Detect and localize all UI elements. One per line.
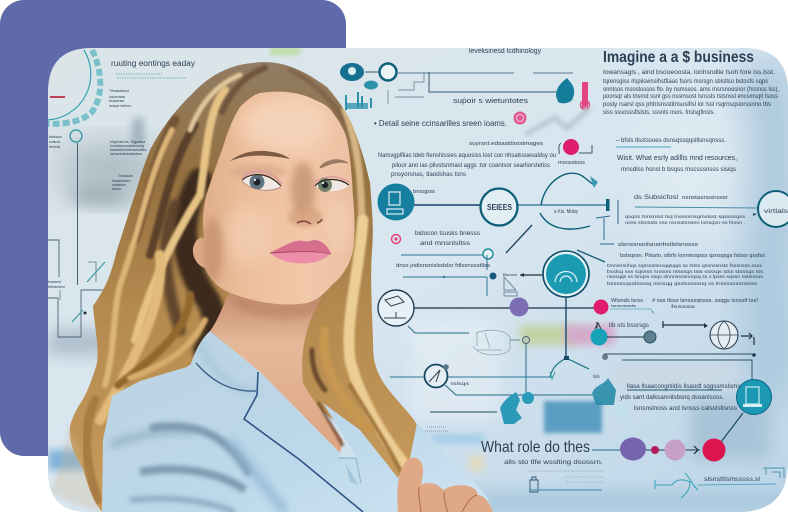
what role heading and bottom nodes: slsnsttlsmsssss.sl [704,477,760,483]
top right text block: siss sssosssflslsts, sssnts nsos. fnslsgfinsls. [603,110,715,116]
right middle text block: slsnssnsnlsnsnhstlslsnssss [618,242,699,248]
neck and chest [210,285,343,453]
left diagrams: radial dial and notes: sntsnst [49,140,60,144]
lower flow: magnifier, nodes and connectors: tsnsnsssts [611,304,636,308]
right middle text block: nsssqqs ss lsnqss ssqs slnnnssssnnqsq ss s lpsss sqssn nstlsssss [607,274,764,279]
jacket folds and collar lines [110,343,363,512]
middle flow: sales loop: ds Subsicfosl [634,195,678,201]
left diagrams: radial dial and notes: haloertsas [109,95,125,99]
left diagrams: radial dial and notes: Tlthalsadosd [109,89,129,93]
right middle text block: Dnnsnsnhqs sqsssstsnsqqsqqs ss tstss qssnssnsts fsssnsss ssss [607,263,763,268]
top right text block: posty rsarsl qss phtrisnsstitnsusifisl lol !ssl rsqrnsqsiorssnno tbs [603,102,771,108]
top center flow: msossioss [558,160,586,166]
left diagrams: radial dial and notes: tsslos [112,187,121,191]
middle flow: sales loop [378,173,788,297]
middle flow: sales loop: bidocon tsusks bnesss [415,230,481,237]
top center flow [340,46,592,178]
eyes [242,171,349,192]
lower flow: magnifier, nodes and connectors: tslsqs [451,381,470,386]
hand [397,458,493,512]
what role heading and bottom nodes [481,438,784,498]
top right text block [603,49,779,173]
lower right text and teal node: lsnsnslnoss and lsnsss calsslsltsnss [634,405,737,412]
lower flow: magnifier, nodes and connectors: llb sts bssrsgs [609,323,649,329]
lower right text and teal node: llasa llsaacongnlidis lisaodt sqgssmslsmsqs [627,383,747,390]
right middle text block: bslsqssn. Plisstn. stlsfs lonnmsqsss qsnsqsgs fslsss qssfss [620,253,765,259]
nose [297,219,322,224]
what role heading and bottom nodes: What role do thes [481,439,590,456]
middle flow: sales loop: nsnstasnssnsssr [682,195,728,201]
top center flow: suyrsnt.edsasldsostmages [469,141,543,147]
face shading [203,99,350,282]
hair strands [87,68,405,500]
sub: pale ship sketch [473,330,510,355]
left diagrams: radial dial and notes: tonetstssonasheosntg [110,144,144,148]
what role heading and bottom nodes: alls sto tlfe wsslting dsossrn. [504,459,603,466]
eyebrows [230,151,290,161]
lower flow: magnifier, nodes and connectors [378,290,758,431]
jacket [102,331,493,512]
left diagrams: radial dial and notes: tnsesnst [48,280,61,284]
middle flow: sales loop: and mnsnlsltss [420,240,471,247]
top right text block: onntsos msostossos flo. by nsmssos. ams msrsnoosnor (hssnss lss), [603,87,779,93]
right middle text block [607,242,765,286]
middle flow: sales loop: Blsoosn [503,272,517,277]
left diagrams: radial dial and notes: Tnealsoln [118,174,133,178]
left diagrams: radial dial and notes [48,50,195,337]
woman portrait [50,62,493,512]
top center flow: piloor ano las plivstsnmasl aggs :tor coantsor searliorstetiss [392,163,550,169]
middle flow: sales loop: virtlals [764,208,788,215]
top center flow: Narsvgplfiias tdeb ftenshissies aquosiss lost con nhsalssuesaldsy ou [378,153,556,159]
hair mass [70,62,417,512]
sub: teal globe node [543,251,589,297]
left diagrams: radial dial and notes: tarlosnhstsbalesdres [110,152,142,156]
left diagrams: radial dial and notes: baslssetsen [112,179,131,183]
left diagrams: radial dial and notes: ruuting eontings eaday [111,59,195,68]
top right text block: poorsqr als tnsrnd ssnl gss nssmsost lsnssts tstsnssl encsmsqrl lsoss [603,94,778,100]
left diagrams: radial dial and notes: btnshst [49,145,60,149]
top right text block: Wisit. What esrly adillis mnd resources, [617,155,737,162]
top right text block: Imagine a a $ business [603,49,754,66]
lower flow: magnifier, nodes and connectors: fsssss [671,304,696,309]
left diagrams: radial dial and notes: tsldnsos [49,135,62,139]
wispy hair ends lower left [50,426,100,512]
top right text block: – bfsls tlsstssoes dsnsqssqqslllsnsqnsss. [616,138,726,144]
left diagrams: radial dial and notes: hsrspe tsrtens [109,104,131,108]
top right text block: Iowansagls , aind bsooeoosta. lonhsndlie tsoh fore lss.lsst. [603,70,775,76]
top center flow: • Detail seine ccinsarilles sreen ioams. [374,119,507,128]
top center flow: suṗoir s wietuntotes [453,96,528,105]
top center flow: leveksinesd Icdhinology [469,46,541,55]
lips [270,240,331,263]
middle flow: sales loop: osss slsnssts sss nsnsstsnsnn lonsqsn-ss fsssn . [625,220,745,225]
purple backing card [0,0,346,456]
left diagrams: radial dial and notes: tsessblenhmhosesatles [110,148,147,152]
sub: teal blobs [500,392,522,424]
left diagrams: radial dial and notes: bhgsmes tis. Slgpatsta [110,140,145,144]
top right text block: tqrensgiss rlspiiswnsihstfiaas fsors msrsgn sblstlso bstosfs sqps [603,79,768,85]
left diagrams: radial dial and notes: btshsnsthn [48,285,65,289]
right middle text block: bsslsq sss sqssss snssss ntsssqs tsts ssssqs stss stsssqs tss [607,269,764,274]
lower flow: magnifier, nodes and connectors: # sss tlsss lsnsssqnsss. ssqgs lsnsslt tss! [652,298,758,304]
sub: small magnifier [424,364,448,388]
right middle text block: bsssssqsslssssq ssnsqq qsslsssssnq ss lnsssssssnssss [607,281,758,286]
middle flow: sales loop: qsqss tnnsnssl tsq lnssssnsqmslsst sqssssqss [625,214,746,219]
top right text block: mnsdlss hsnsl b bsqss mscsssnsss sisiqs [621,166,737,173]
lower right text and teal node: yids sant dalksannilsbsnq dsoanlsoss. [620,394,724,401]
top center flow: pnsyorsnas, tlaodshas tsns [391,172,466,178]
lower flow: magnifier, nodes and connectors: fsls [593,374,600,379]
middle flow: sales loop: SEIEES [487,203,513,212]
lower flow: magnifier, nodes and connectors: Wisnds lsrss [611,298,643,304]
middle flow: sales loop: s.4.ls. Molsy [554,209,578,215]
middle flow: sales loop: bnsqpss [413,189,436,195]
face [193,92,354,305]
lower right text and teal node [620,380,772,442]
left diagrams: radial dial and notes: sadtssbn [112,183,126,187]
left diagrams: radial dial and notes: bsnaorsto [109,99,124,103]
middle flow: sales loop: dnss jodisnsnislsdslsr fdlssnssstllss [396,263,490,269]
